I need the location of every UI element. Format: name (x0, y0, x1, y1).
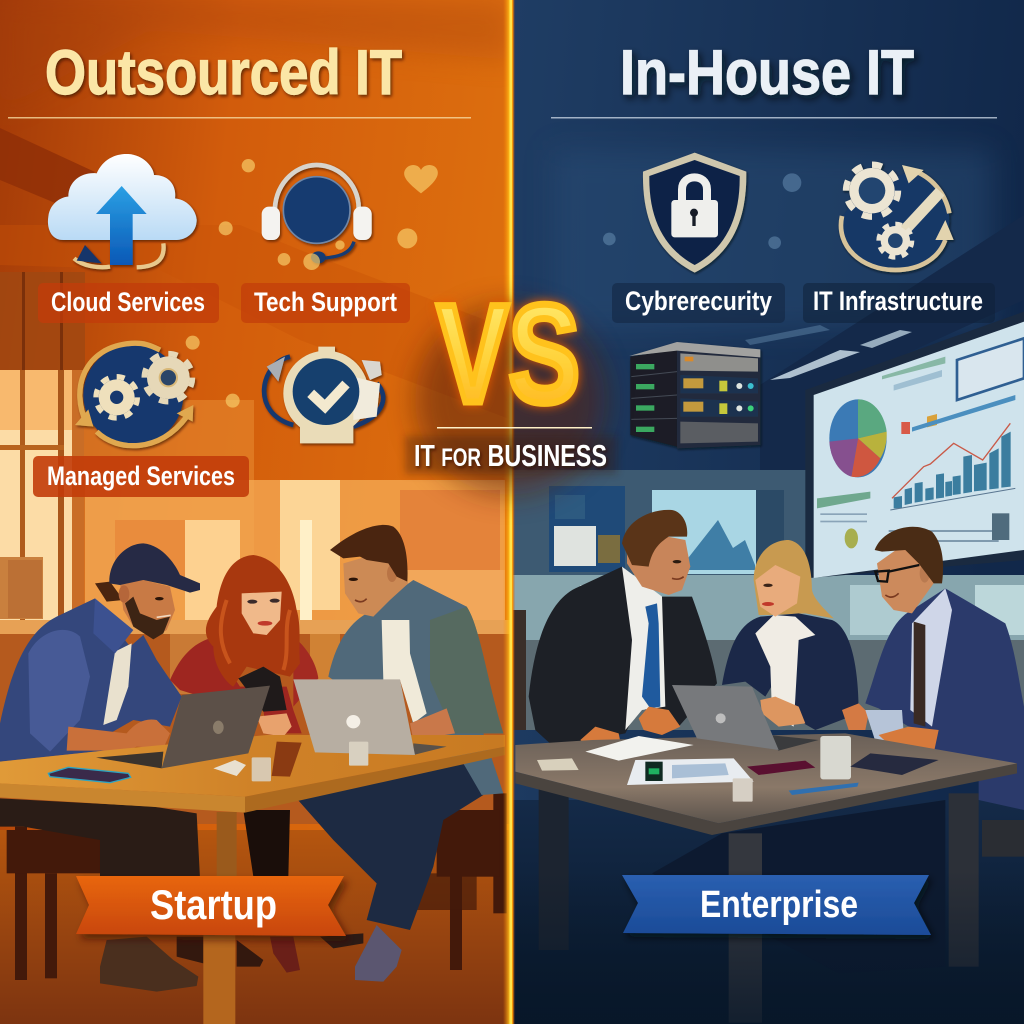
person: man in denim legs (295, 763, 483, 930)
shoes (100, 925, 402, 992)
subtitle: IT for business: IT FOR BUSINESS (414, 438, 607, 473)
icon: server rack (629, 342, 760, 448)
label: Tech Support: Tech Support (254, 287, 397, 317)
wall screen with charts (805, 312, 1024, 578)
banner: Startup (76, 876, 346, 936)
person: man in cap (0, 543, 200, 762)
background: office building and windows (0, 0, 512, 824)
background monitors (549, 486, 784, 574)
center emblem: VS (405, 275, 617, 495)
monitor: mountain chart (652, 490, 784, 574)
person: man in denim jacket (328, 525, 503, 795)
title: In-House IT: In-House IT (620, 38, 914, 108)
label: Tech Support (241, 283, 410, 323)
documents and devices (537, 736, 939, 802)
label: IT Infrastructure (803, 283, 995, 323)
icon: cybersecurity shield (643, 153, 746, 273)
pie chart (829, 399, 887, 477)
label: Cybrerecurity: Cybrerecurity (625, 286, 772, 316)
title: Outsourced IT: Outsourced IT (45, 38, 402, 108)
decorative hearts left (186, 159, 438, 408)
label: Managed Services (33, 456, 249, 497)
banner: Startup: Startup (150, 881, 277, 928)
chairs (7, 793, 507, 980)
banner: Enterprise (622, 875, 931, 935)
icon: managed services gears (75, 343, 193, 446)
floor (0, 830, 512, 1024)
laptop: dark (96, 686, 270, 768)
table items: phone and cups (48, 742, 368, 783)
table: startup (0, 735, 505, 1024)
person: man in cap legs (0, 798, 200, 878)
laptop (672, 685, 819, 751)
label: Cybrerecurity (612, 283, 785, 323)
table: enterprise (515, 733, 1017, 1023)
dashboard details (817, 338, 1024, 548)
panel: outsourced IT (left) (0, 0, 512, 1024)
person: woman with blond hair (722, 540, 859, 730)
panel: in-house IT (right) (512, 0, 1024, 1024)
floor (512, 800, 1024, 1024)
background: office and wall panels (512, 150, 1024, 730)
icon: IT infrastructure gears and wrench (841, 165, 954, 270)
table legs (539, 783, 1024, 973)
person: woman with red hair (170, 555, 318, 737)
people: enterprise team (515, 510, 1024, 1023)
label: IT Infrastructure: IT Infrastructure (813, 286, 983, 316)
label: Managed Services: Managed Services (47, 461, 235, 491)
person: man with blue tie (529, 510, 717, 752)
center emblem: VS: VS (437, 275, 580, 432)
label: Cloud Services: Cloud Services (51, 287, 205, 317)
person: woman legs (243, 810, 290, 877)
person: man with glasses (842, 527, 1024, 810)
icon: cloud services (48, 154, 197, 267)
bar and line chart (890, 423, 1015, 510)
people: startup team (0, 525, 507, 1024)
icon: verified checkmark gear (264, 347, 383, 443)
decorative dots right (603, 173, 801, 249)
laptop: silver (293, 679, 447, 755)
central divider glow (503, 0, 515, 1024)
label: Cloud Services (38, 283, 219, 323)
icon: tech support headset (262, 165, 372, 263)
monitor: data wall (549, 486, 625, 572)
banner: Enterprise: Enterprise (700, 884, 858, 926)
